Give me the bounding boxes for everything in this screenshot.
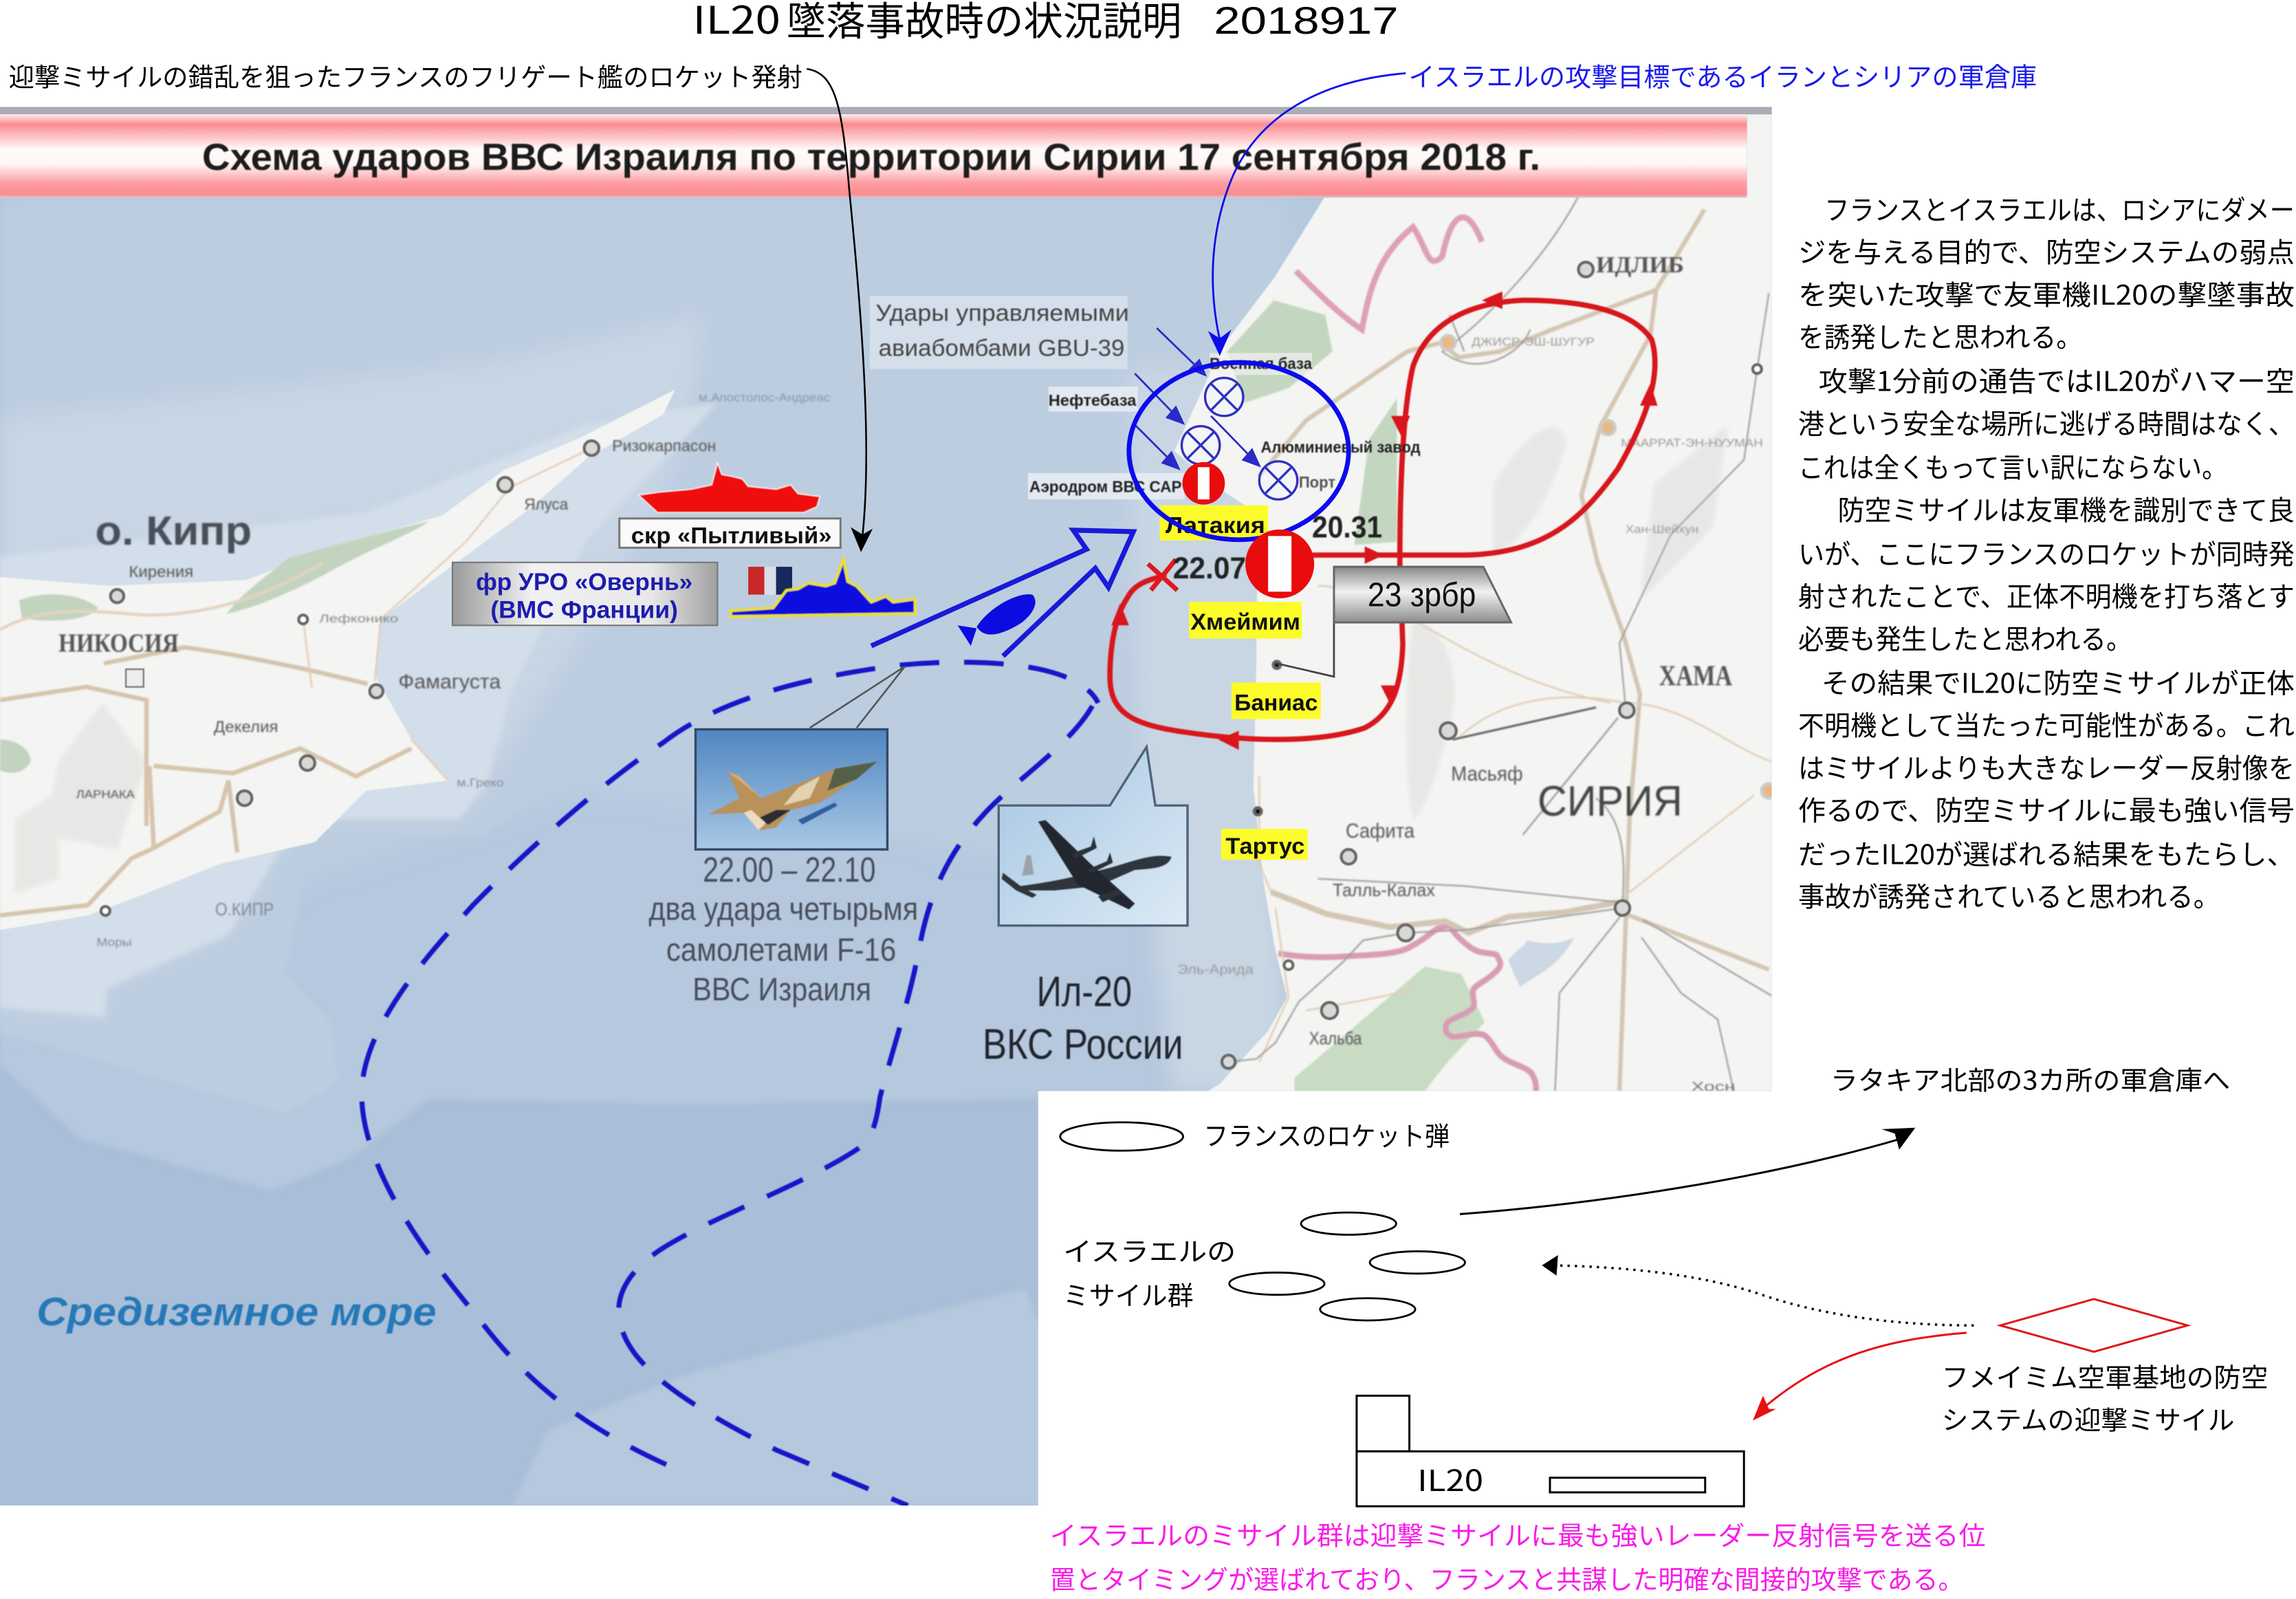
banner: Russian map title: Схема ударов ВВС Израиля по территории Сирии 17 сентября 2018 г.	[202, 136, 1540, 178]
map place labels: м.Греко	[457, 776, 504, 790]
text block: explanation: 作るので、防空ミサイルに最も強い信号	[1798, 790, 2295, 829]
terrain, hills, borders and roads	[0, 191, 1772, 1091]
map place labels: Эль-Арида	[1177, 963, 1254, 977]
callout: F-16 photo	[695, 666, 905, 849]
target labels: Военная база	[1210, 355, 1313, 373]
map place labels: Фамагуста	[398, 671, 501, 693]
map place labels: Декелия	[214, 718, 278, 736]
label: Latakia	[1160, 505, 1268, 541]
text: F-16 strike caption: ВВС Израиля	[692, 971, 871, 1007]
map place labels: Ялуса	[524, 495, 569, 513]
text block: explanation: を突いた攻撃で友軍機IL20の撃墜事故	[1798, 274, 2295, 313]
time labels: 22.07	[1173, 552, 1246, 585]
place markers	[101, 262, 1776, 1068]
label: toward Latakia depots: ラタキア北部の3カ所の軍倉庫へ	[1830, 1060, 2230, 1098]
time labels	[1173, 511, 1382, 585]
map label: Mediterranean Sea: Средиземное море	[36, 1290, 437, 1334]
arrow: rockets toward depots	[1460, 1128, 1915, 1214]
text block: explanation: 必要も発生したと思われる。	[1798, 618, 2132, 657]
label: Banias: Баниас	[1234, 690, 1318, 715]
text block: explanation: だったIL20が選ばれる結果をもたらし、	[1798, 833, 2295, 872]
white diagram panel	[1038, 1091, 2296, 1599]
label: Khmeimim: Хмеймим	[1190, 609, 1300, 635]
arrow: targets annotation to depots	[1208, 73, 1406, 356]
caption: GBU-39 strikes	[870, 296, 1129, 369]
conclusion text: magenta: 置とタイミングが選ばれており、フランスと共謀した明確な間接的攻撃である。	[1050, 1559, 1964, 1597]
conclusion text: magenta	[1050, 1516, 1986, 1597]
Cyprus land	[0, 389, 675, 930]
icon: F-16 jet	[709, 761, 877, 830]
crash marker: red X	[1148, 559, 1177, 590]
label: Pytlivy: скр «Пытливый»	[631, 523, 832, 548]
conclusion text: magenta: イスラエルのミサイル群は迎撃ミサイルに最も強いレーダー反射信号を送る位	[1050, 1516, 1986, 1554]
label: Banias	[1232, 682, 1321, 719]
map place labels: м.Апостолос-Андреас	[699, 391, 831, 404]
target labels: Порт	[1299, 473, 1335, 491]
text block: explanation: を誘発したと思われる。	[1798, 316, 2082, 356]
white footer strip	[0, 1505, 1038, 1599]
diagram: IL20 outline: IL20	[1417, 1458, 1483, 1500]
flight path: Il-20 red route	[1110, 292, 1658, 750]
target ellipse: blue circle	[1129, 362, 1348, 540]
icon: air defence site diamond	[2000, 1299, 2187, 1352]
map place labels: Кирения	[129, 563, 193, 580]
text block: explanation: 攻撃1分前の通告ではIL20がハマー空	[1819, 360, 2295, 400]
map place labels: О.КИПР	[215, 900, 274, 920]
map place labels: Хальба	[1309, 1029, 1362, 1048]
diagram: IL20 outline	[1357, 1395, 1744, 1506]
map place labels: Хосн	[1692, 1080, 1735, 1094]
label: Tartus: Тартус	[1225, 834, 1304, 859]
icon: red ship, Russian frigate	[638, 463, 820, 512]
right white panel edge	[1772, 107, 2296, 1599]
text: F-16 strike caption	[648, 850, 918, 1007]
callout: 23rd brigade	[1277, 567, 1511, 677]
map place labels: Моры	[97, 936, 132, 949]
label: Khmeimim	[1189, 602, 1302, 638]
text block: explanation: これは全くもって言い訳にならない。	[1798, 446, 2227, 486]
arrow: French frigate annotation to ship	[807, 69, 873, 552]
Syria land	[1174, 114, 1772, 1091]
icon: Syrian airfield no-entry marker	[1183, 462, 1225, 505]
sea depth bands	[0, 196, 1464, 1505]
target labels	[1028, 353, 1421, 499]
map place labels: СИРИЯ	[1538, 778, 1683, 825]
map place labels: НИКОСИЯ	[58, 629, 179, 658]
map place labels	[58, 252, 1763, 1094]
label: Latakia: Латакия	[1166, 512, 1265, 538]
icon: Khmeimim no-entry marker	[1245, 530, 1314, 598]
map place labels: Ризокарпасон	[612, 437, 716, 455]
label: Israeli missile group: ミサイル群	[1063, 1275, 1194, 1313]
map place labels: Лефконико	[319, 612, 398, 625]
label: Israeli missile group	[1063, 1231, 1236, 1313]
map place labels: ДЖИСР-ЭШ-ШУГУР	[1472, 336, 1595, 349]
label: Khmeimim air defence: フメイミム空軍基地の防空	[1942, 1358, 2268, 1395]
label: Khmeimim air defence: システムの迎撃ミサイル	[1942, 1400, 2235, 1437]
target labels: Аэродром ВВС САР	[1029, 478, 1181, 496]
target labels: Нефтебаза	[1049, 391, 1137, 409]
caption: GBU-39 strikes: авиабомбами GBU-39	[879, 335, 1124, 361]
legend: French rocket: フランスのロケット弾	[1203, 1116, 1450, 1153]
map place labels: о. Кипр	[95, 508, 252, 554]
text block: explanation: 事故が誘発されていると思われる。	[1798, 875, 2220, 915]
map place labels: ИДЛИБ	[1596, 252, 1684, 278]
text: Il-20 caption: ВКС России	[983, 1021, 1183, 1069]
icon: French flag	[748, 567, 792, 595]
icon: Il-20 aircraft	[1002, 820, 1172, 909]
text: F-16 strike caption: самолетами F-16	[666, 932, 896, 968]
icon: targets (crossed circles)	[1181, 378, 1298, 499]
map place labels: Масьяф	[1451, 763, 1523, 785]
label: French frigate Auvergne: (ВМС Франции)	[490, 597, 678, 624]
caption: GBU-39 strikes: Удары управляемыми	[875, 300, 1129, 326]
callout: Il-20 photo	[998, 747, 1188, 926]
text: F-16 strike caption: два удара четырьмя	[648, 891, 918, 926]
banner: Russian map title	[0, 107, 1772, 198]
label: French frigate Auvergne	[452, 563, 717, 625]
time labels: 20.31	[1312, 511, 1382, 545]
text block: explanation: 防空ミサイルは友軍機を識別できて良	[1837, 489, 2295, 528]
arrow: dotted interceptor path	[1542, 1255, 1974, 1325]
icon: blue ship, French frigate	[731, 559, 915, 617]
map place labels: Сафита	[1346, 820, 1414, 842]
map place labels: Талль-Калах	[1333, 881, 1435, 900]
annotation: Israeli targets: イスラエルの攻撃目標であるイランとシリアの軍倉庫	[1409, 57, 2037, 95]
callout: 23rd brigade: 23 зрбр	[1368, 577, 1476, 614]
label: Israeli missile group: イスラエルの	[1063, 1231, 1236, 1269]
map place labels: МААРРАТ-ЭН-НУУМАН	[1621, 437, 1763, 450]
target labels: Алюминиевый завод	[1260, 438, 1421, 456]
arrow: red interceptor path	[1753, 1333, 1967, 1421]
map place labels: ХАМА	[1659, 660, 1732, 693]
text: F-16 strike caption: 22.00 – 22.10	[703, 850, 875, 889]
text: Il-20 caption: Ил-20	[1037, 968, 1132, 1016]
text block: explanation: ジを与える目的で、防空システムの弱点	[1798, 231, 2295, 270]
text block: explanation	[1798, 188, 2295, 915]
guided bomb arrows	[1135, 328, 1259, 468]
title	[692, 0, 1399, 47]
map place labels: ЛАРНАКА	[76, 788, 135, 801]
label: Khmeimim air defence	[1942, 1358, 2268, 1437]
Israeli missile group ellipses	[1229, 1212, 1465, 1320]
text block: explanation: その結果でIL20に防空ミサイルが正体	[1822, 662, 2295, 701]
strike arrow: outlined blue	[871, 530, 1133, 656]
text: Il-20 caption	[983, 968, 1183, 1069]
title: 2018917	[1214, 0, 1399, 42]
annotation: French frigate rockets: 迎撃ミサイルの錯乱を狙ったフランスのフリゲート艦のロケット発射	[9, 57, 802, 94]
top strip white	[0, 0, 2296, 107]
label: French frigate Auvergne: фр УРО «Овернь»	[476, 569, 692, 596]
map place labels: Хан-Шейхун	[1626, 523, 1698, 536]
Israeli F-16 route: blue dashed	[362, 662, 1098, 1505]
legend: French rocket	[1060, 1116, 1450, 1153]
map panel: eastern Mediterranean	[0, 107, 1776, 1505]
icon: missile	[958, 594, 1036, 646]
